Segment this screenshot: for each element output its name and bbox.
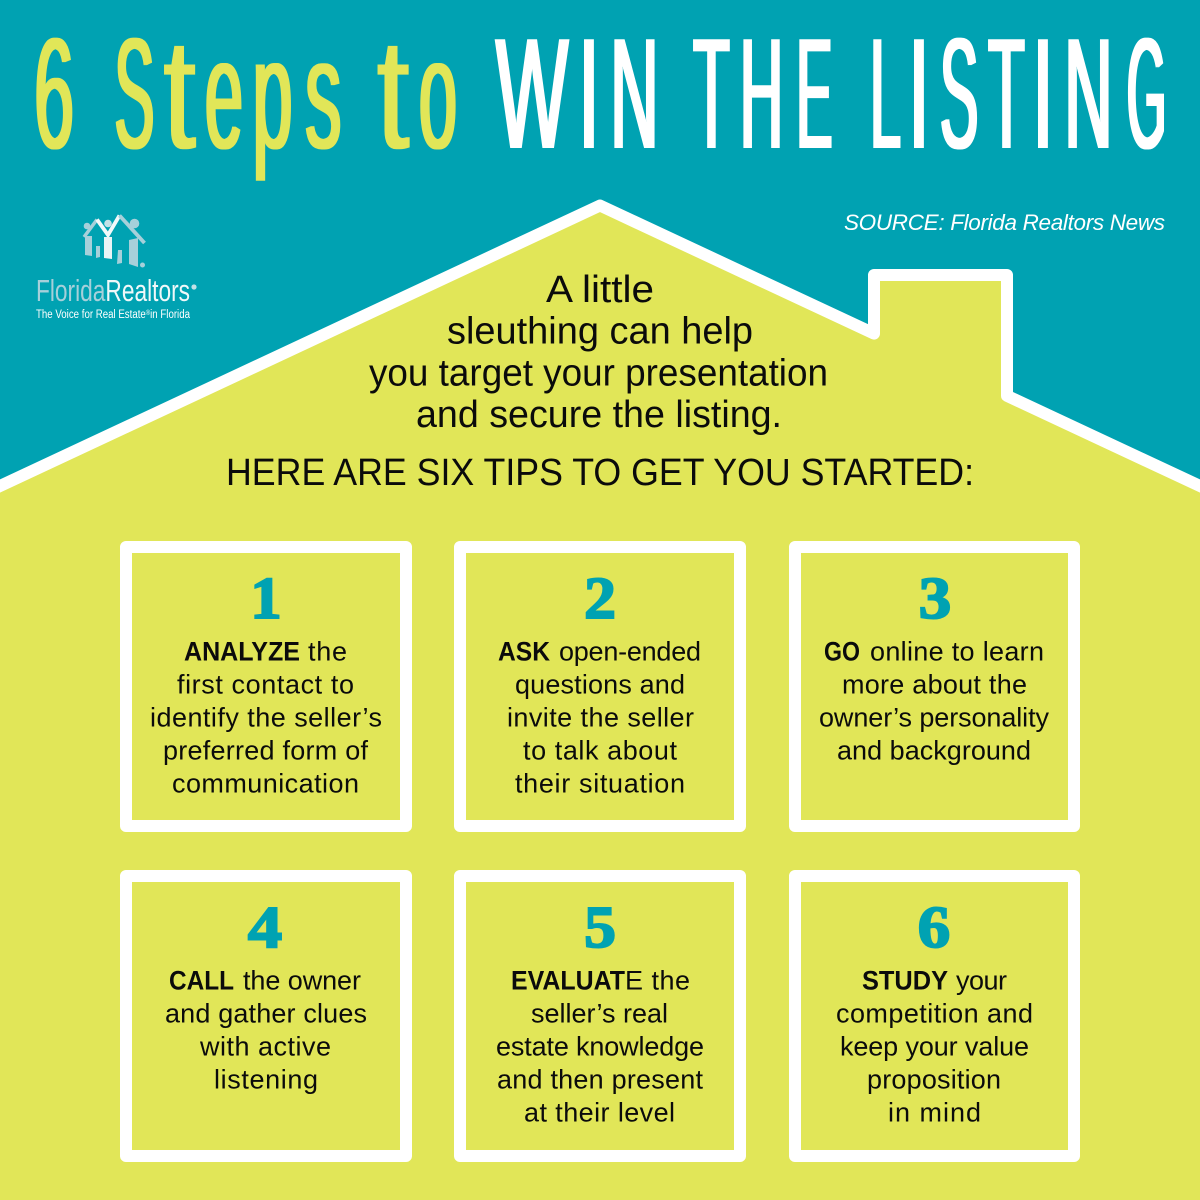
step 1 text: identify the seller’s	[150, 702, 382, 732]
panel: step 2	[460, 547, 740, 826]
step 4 text: with active	[199, 1031, 331, 1061]
registered mark	[191, 284, 197, 290]
step 2 text: ASK	[498, 636, 550, 666]
step 1 text	[150, 636, 382, 798]
title: s	[305, 6, 341, 182]
step 1 text: ANALYZE	[184, 636, 300, 666]
logo: Florida Realtors	[36, 216, 197, 321]
step 6 text: STUDY	[862, 965, 948, 995]
step 2 text: to talk about	[523, 735, 677, 765]
title: I	[909, 6, 929, 182]
step 2 text: invite the seller	[507, 702, 694, 732]
title: p	[252, 6, 292, 182]
step number 6: 6	[918, 896, 950, 960]
step 2 text: open-ended	[559, 636, 701, 666]
title: S	[940, 6, 978, 182]
step number 2: 2	[584, 566, 616, 631]
step 4 text: and gather clues	[165, 998, 367, 1028]
title: T	[693, 6, 730, 182]
panel: step 4	[126, 876, 406, 1156]
title	[34, 6, 1166, 182]
title: T	[988, 6, 1025, 182]
step 5 text: EVALUAT	[511, 965, 625, 995]
step 6 text: your	[956, 965, 1007, 995]
title: 6	[34, 6, 74, 182]
intro text: you target your presentation	[369, 352, 828, 394]
intro text	[369, 269, 828, 436]
title: H	[740, 6, 783, 182]
step 3 text: online to learn	[870, 636, 1044, 666]
step 2 text: questions and	[515, 669, 685, 699]
step number 4: 4	[248, 894, 282, 960]
step number 5: 5	[584, 895, 616, 960]
step 1 text: preferred form of	[163, 735, 368, 765]
step 2 text	[498, 636, 701, 798]
step 6 text	[836, 965, 1033, 1127]
subheading: HERE ARE SIX TIPS TO GET YOU STARTED:	[226, 452, 974, 494]
step 1 text: first contact to	[177, 669, 354, 699]
step number 3: 3	[919, 567, 951, 631]
source credit: SOURCE: Florida Realtors News	[844, 210, 1165, 235]
intro text: sleuthing can help	[447, 310, 753, 352]
tagline: The Voice for Real Estate	[36, 309, 166, 321]
title: I	[1033, 6, 1053, 182]
step 4 text	[165, 965, 367, 1094]
title: I	[579, 6, 599, 182]
step 1 text: communication	[172, 768, 359, 798]
panel: step 3	[795, 547, 1074, 826]
wordmark: FloridaRealtors	[36, 273, 190, 308]
step 5 text: and then present	[497, 1064, 703, 1094]
step 1 text: the	[308, 636, 347, 666]
tagline: ®	[146, 309, 151, 317]
step number 1: 1	[250, 567, 282, 632]
tagline: in Florida	[150, 309, 190, 321]
step 4 text: CALL	[169, 965, 234, 995]
step 6 text: keep your value	[840, 1031, 1029, 1061]
step 3 text: more about the	[842, 669, 1027, 699]
title: N	[1064, 6, 1112, 182]
title: E	[796, 6, 832, 182]
step 3 text: owner’s personality	[819, 702, 1050, 732]
title: S	[114, 6, 154, 182]
title: W	[496, 6, 568, 182]
step 5 text: estate knowledge	[496, 1031, 704, 1061]
step 5 text: seller’s real	[531, 998, 668, 1028]
intro text: and secure the listing.	[416, 394, 782, 436]
step 6 text: in mind	[888, 1097, 981, 1127]
panel: step 6	[795, 876, 1074, 1156]
title: e	[205, 6, 243, 182]
step 5 text	[496, 965, 704, 1127]
step 3 text: GO	[824, 636, 860, 666]
step 2 text: their situation	[515, 768, 685, 798]
icon: houses and people	[84, 216, 145, 268]
step 5 text: E the	[625, 965, 690, 995]
title: o	[419, 6, 457, 182]
step 6 text: competition and	[836, 998, 1033, 1028]
step 6 text: proposition	[867, 1064, 1001, 1094]
title: L	[870, 6, 901, 182]
step 4 text: listening	[214, 1064, 318, 1094]
step 5 text: at their level	[524, 1097, 675, 1127]
panel: step 1	[126, 547, 406, 826]
step 3 text	[819, 636, 1050, 765]
title: N	[610, 6, 658, 182]
title: t	[164, 6, 196, 182]
title: t	[377, 6, 409, 182]
step 4 text: the owner	[243, 965, 361, 995]
step 3 text: and background	[837, 735, 1031, 765]
panel: step 5	[460, 876, 740, 1156]
intro text: A little	[546, 269, 654, 311]
